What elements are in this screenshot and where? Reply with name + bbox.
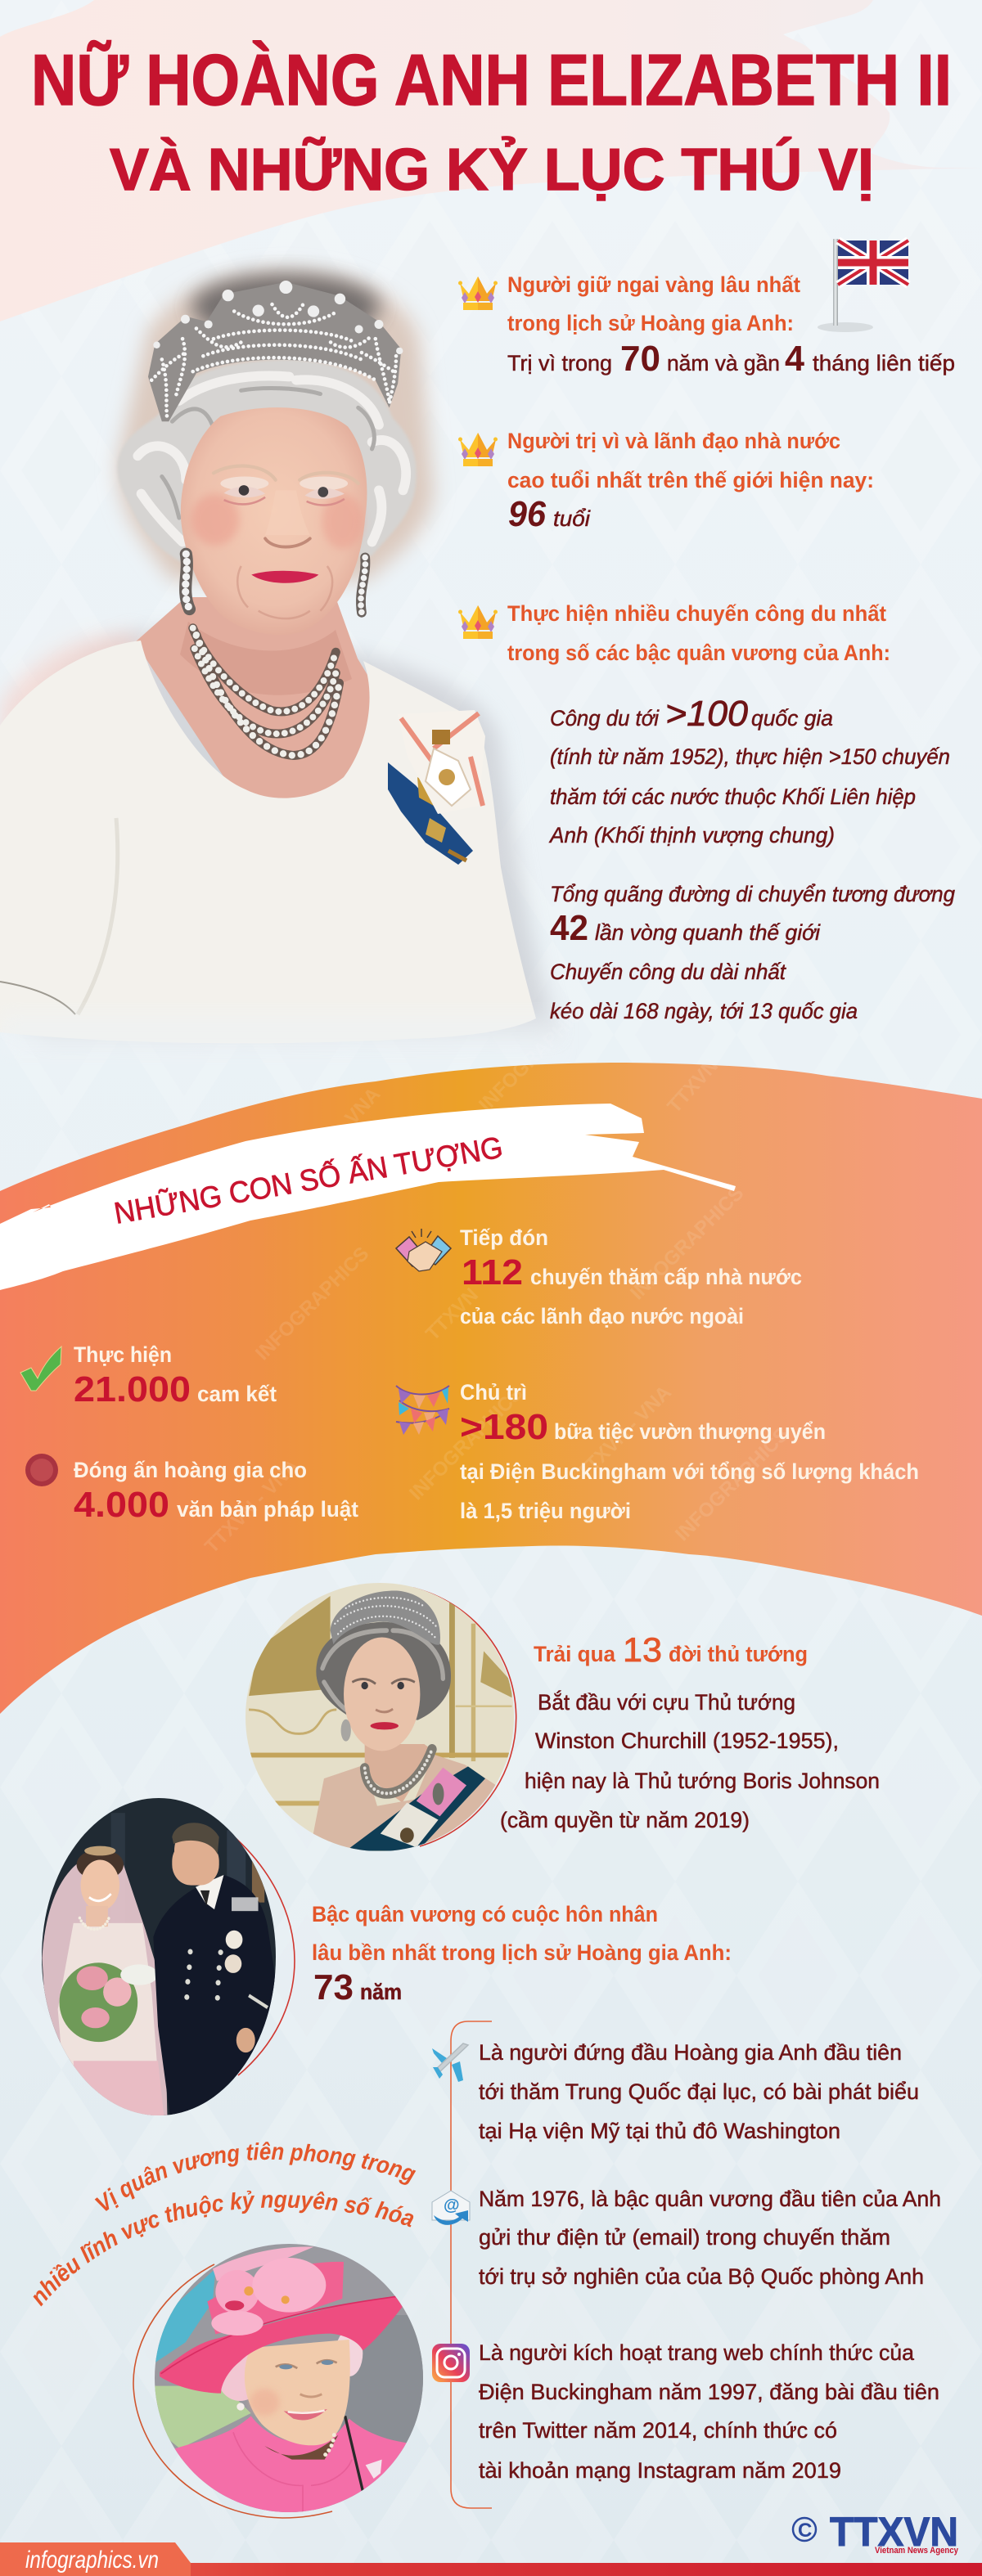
text: 13 prime ministers: Bắt đầu với cựu Thủ tướng: [538, 1689, 795, 1715]
stat: royal seal: Đóng ấn hoàng gia cho: [74, 1458, 307, 1482]
text: longest marriage: lâu bền nhất trong lịch sử Hoàng gia Anh:: [312, 1940, 732, 1965]
digital pioneer item 3: Điện Buckingham năm 1997, đăng bài đầu tiên: [479, 2380, 939, 2404]
stat: state visits: 112: [462, 1252, 523, 1292]
record 1: longest reign: tháng liên tiếp: [813, 351, 955, 375]
record 2: oldest monarch: Người trị vì và lãnh đạo nhà nước: [507, 429, 840, 453]
icon: green check: [20, 1346, 61, 1391]
photo: Queen portrait with tiara: [240, 1579, 521, 1854]
necklace: [193, 628, 340, 755]
stat: garden parties: [396, 1380, 919, 1523]
text: 13 prime ministers: đời thủ tướng: [669, 1642, 808, 1666]
stat: commitments: Thực hiện: [74, 1342, 172, 1367]
digital pioneer item 2: gửi thư điện tử (email) trong chuyến thăm: [479, 2225, 890, 2250]
watermarks: VNA: [340, 1083, 385, 1129]
head group: [117, 281, 417, 755]
watermarks: INFOGRAPHICS: [251, 1243, 373, 1364]
main portrait of the Queen: [0, 270, 556, 1055]
record 2: oldest monarch: 96: [508, 494, 546, 534]
curved heading: digital pioneer: nhiều lĩnh vực thuộc kỷ nguyên số hóa: [33, 2191, 414, 2307]
record 2: oldest monarch: tuổi: [553, 506, 591, 531]
record 1: longest reign: Trị vì trong: [507, 351, 612, 375]
record 3: most travels: lần vòng quanh thế giới: [595, 920, 821, 945]
record 3: most travels: Tổng quãng đường di chuyển tương đương: [550, 882, 955, 906]
record 3: most travels: Thực hiện nhiều chuyến công du nhất: [507, 601, 886, 626]
digital pioneer item 2: [432, 2187, 941, 2289]
record 3: most travels: 42: [550, 908, 588, 948]
stat: royal seal: 4.000: [74, 1485, 169, 1525]
record 1: longest reign: Người giữ ngai vàng lâu nhất: [507, 272, 800, 297]
icon: crown: [458, 605, 498, 639]
text: 13 prime ministers: (cầm quyền từ năm 2019): [500, 1808, 750, 1832]
digital pioneer item 2: Năm 1976, là bậc quân vương đầu tiên của Anh: [479, 2187, 941, 2211]
record 3: most travels: >100: [665, 694, 749, 734]
panel: orange statistics band: [0, 994, 982, 1714]
stat: garden parties: tại Điện Buckingham với tổng số lượng khách: [460, 1459, 919, 1484]
text: longest marriage: năm: [360, 1980, 402, 2004]
icon: airplane: [432, 2043, 468, 2082]
watermarks: TTXVN - VNA: [200, 1455, 304, 1558]
record 2: oldest monarch: [458, 429, 874, 534]
photo: royal wedding couple: [33, 1786, 295, 2123]
icon: UK flag on pole: [818, 239, 908, 332]
watermarks: INFOGRAPHICS: [475, 994, 597, 1116]
white sweater: [0, 641, 536, 1043]
stat: royal seal: [25, 1454, 358, 1525]
hair: [117, 359, 417, 563]
icon: bunting: [396, 1386, 449, 1435]
icon: wax seal: [25, 1454, 58, 1486]
logo: TTXVN copyright: C: [798, 2520, 812, 2542]
stat: garden parties: là 1,5 triệu người: [460, 1499, 631, 1523]
curved heading: digital pioneer: [33, 2142, 416, 2307]
stat: state visits: Tiếp đón: [460, 1225, 548, 1250]
record 3: most travels: Công du tới: [550, 706, 660, 731]
text: 13 prime ministers: Winston Churchill (1952-1955),: [535, 1729, 839, 1753]
text: 13 prime ministers: [500, 1630, 880, 1832]
digital pioneer item 3: tài khoản mạng Instagram năm 2019: [479, 2458, 841, 2483]
watermarks: INFOGRAPHICS: [626, 1182, 748, 1304]
tiara: [148, 281, 403, 421]
digital pioneer item 3: [432, 2340, 939, 2483]
digital pioneer item 1: tới thăm Trung Quốc đại lục, có bài phát biểu: [479, 2079, 919, 2104]
white brush banner: [0, 1104, 736, 1290]
logo: TTXVN copyright: TTXVN: [830, 2509, 958, 2555]
timeline line: [451, 2021, 492, 2508]
text: longest marriage: Bậc quân vương có cuộc hôn nhân: [312, 1902, 658, 1926]
digital pioneer item 3: trên Twitter năm 2014, chính thức có: [479, 2418, 837, 2443]
stat: state visits: của các lãnh đạo nước ngoài: [460, 1304, 744, 1328]
face: [181, 407, 367, 635]
watermarks: TTXVN - VNA: [573, 1382, 676, 1484]
red and white order medal: [398, 710, 485, 814]
record 1: longest reign: trong lịch sử Hoàng gia Anh:: [507, 311, 794, 335]
icon: crown: [458, 433, 498, 466]
text: 13 prime ministers: Trải qua: [534, 1642, 616, 1666]
record 3: most travels: [458, 601, 955, 1023]
footer bar: [0, 2542, 982, 2576]
stat: state visits: chuyến thăm cấp nhà nước: [530, 1265, 802, 1289]
curved heading: digital pioneer: Vị quân vương tiên phong trong: [95, 2142, 416, 2211]
stat: commitments: 21.000: [74, 1369, 191, 1409]
icon: crown: [458, 276, 498, 310]
neck and chest: [135, 597, 385, 810]
record 3: most travels: quốc gia: [751, 706, 833, 731]
text: 13 prime ministers: hiện nay là Thủ tướng Boris Johnson: [525, 1769, 880, 1793]
record 3: most travels: kéo dài 168 ngày, tới 13 quốc gia: [550, 999, 858, 1023]
digital pioneer item 1: [432, 2040, 919, 2143]
stat: garden parties: >180: [460, 1407, 548, 1447]
blue ribbon medal: [388, 762, 473, 865]
record 3: most travels: trong số các bậc quân vương của Anh:: [507, 641, 890, 665]
record 1: longest reign: 70: [620, 339, 660, 379]
stat: state visits: [396, 1225, 802, 1328]
title: [31, 39, 952, 203]
watermarks: INFOGRAPHICS: [671, 1423, 793, 1545]
watermarks: INFOGRAPHICS: [405, 1382, 527, 1504]
record 3: most travels: thăm tới các nước thuộc Khối Liên hiệp: [550, 784, 916, 809]
record 3: most travels: Chuyến công du dài nhất: [550, 960, 786, 984]
icon: email: @: [444, 2196, 460, 2214]
watermarks: TTXVN: [421, 1284, 483, 1345]
record 3: most travels: Anh (Khối thịnh vượng chung): [548, 823, 835, 847]
icon: handshake: [396, 1229, 451, 1271]
logo: TTXVN copyright: Vietnam News Agency: [875, 2546, 959, 2556]
top pink brush background: [0, 0, 982, 321]
stat: commitments: cam kết: [197, 1382, 277, 1406]
photo: Queen in pink hat: [133, 2239, 428, 2518]
watermarks: TTXVN: [663, 1054, 723, 1117]
digital pioneer item 1: tại Hạ viện Mỹ tại thủ đô Washington: [479, 2119, 840, 2143]
stat: garden parties: bữa tiệc vườn thượng uyển: [554, 1419, 826, 1444]
record 1: longest reign: năm và gần: [667, 351, 780, 375]
heading: impressive numbers: NHỮNG CON SỐ ẤN TƯỢNG: [111, 1130, 505, 1230]
digital pioneer item 2: tới trụ sở nghiên của của Bộ Quốc phòng Anh: [479, 2264, 924, 2289]
title: VÀ NHỮNG KỶ LỤC THÚ VỊ: [110, 137, 874, 203]
record 2: oldest monarch: cao tuổi nhất trên thế giới hiện nay:: [507, 468, 874, 492]
stat: garden parties: Chủ trì: [460, 1380, 527, 1405]
text: longest marriage: 73: [313, 1967, 354, 2007]
icon: email: [432, 2191, 470, 2225]
digital pioneer item 1: Là người đứng đầu Hoàng gia Anh đầu tiên: [479, 2040, 902, 2065]
record 1: longest reign: 4: [785, 339, 805, 379]
stat: commitments: [20, 1342, 277, 1409]
watermarks: [200, 994, 793, 1558]
earrings: [186, 554, 365, 613]
stat: royal seal: văn bản pháp luật: [177, 1497, 358, 1522]
digital pioneer item 3: Là người kích hoạt trang web chính thức của: [479, 2340, 915, 2365]
text: 13 prime ministers: 13: [623, 1630, 662, 1669]
icon: Instagram: [432, 2344, 470, 2382]
record 3: most travels: (tính từ năm 1952), thực hiện >150 chuyến: [550, 744, 950, 769]
footer bar: infographics.vn: [25, 2547, 159, 2574]
text: longest marriage: [312, 1902, 732, 2007]
record 1: longest reign: [458, 272, 955, 379]
